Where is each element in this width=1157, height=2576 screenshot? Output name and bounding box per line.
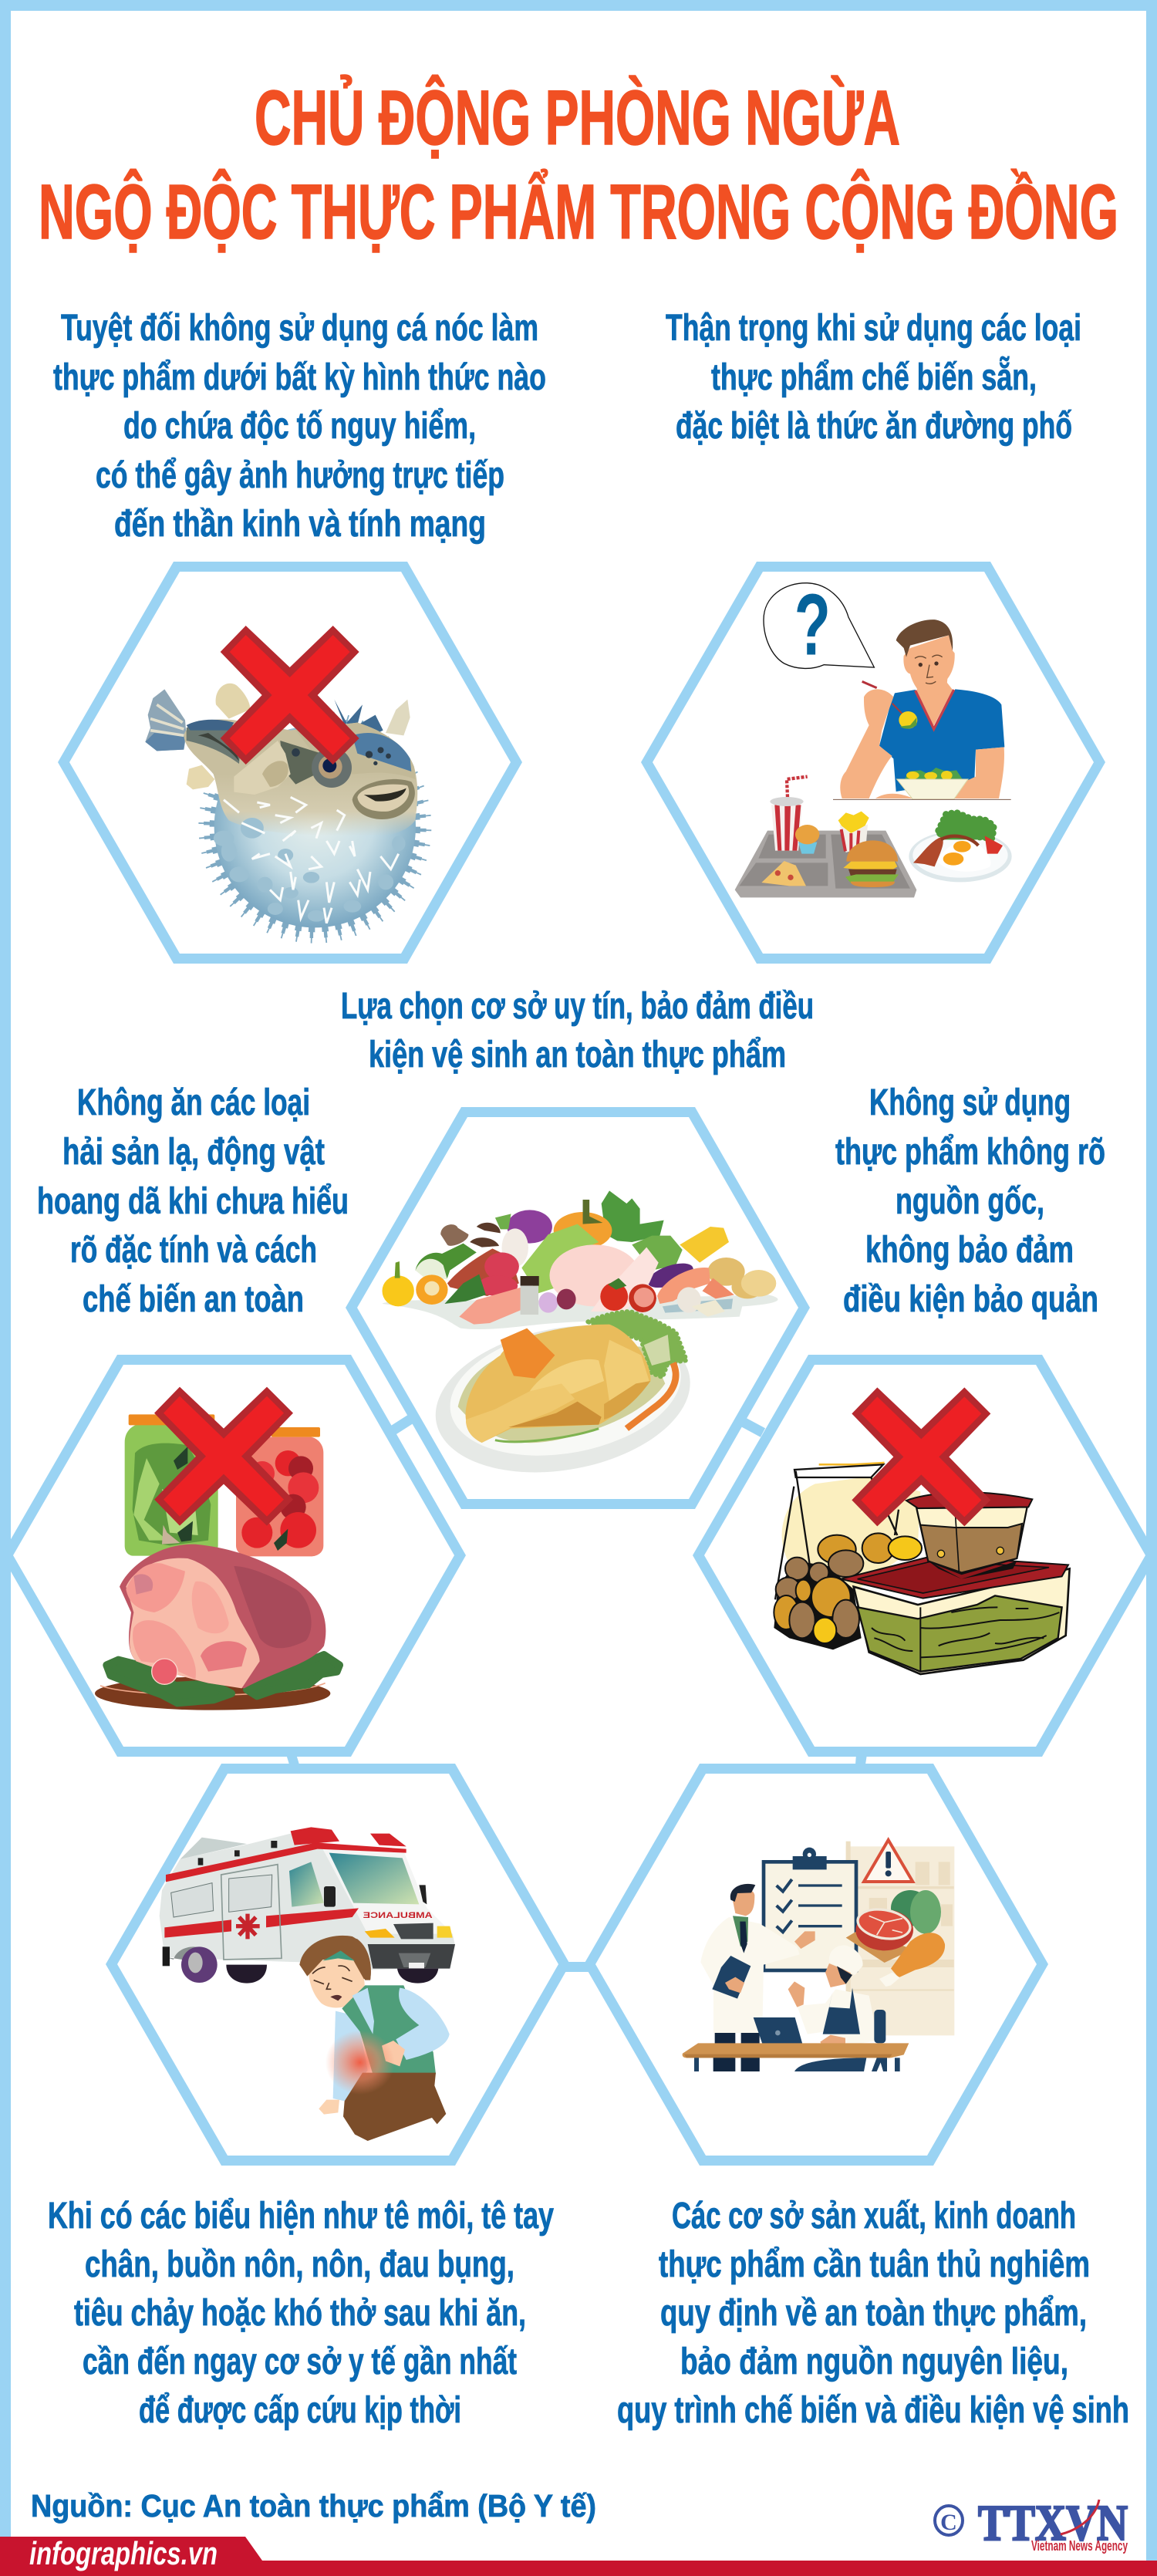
text: do not eat strange seafood: Không ăn các loại [77, 1082, 310, 1123]
text: symptoms and emergency care: tiêu chảy hoặc khó thở sau khi ăn, [74, 2293, 526, 2334]
footer red bar with site name [0, 2535, 1157, 2576]
text: puffer fish warning: đến thần kinh và tính mạng [114, 504, 486, 545]
text: symptoms and emergency care: cần đến ngay cơ sở y tế gần nhất [83, 2341, 517, 2382]
text: unknown origin food [835, 1082, 1105, 1320]
text: food businesses compliance [617, 2196, 1129, 2431]
hexagon frame 6 [106, 1764, 570, 2166]
hexagon frame 5 [693, 1355, 1157, 1757]
text: do not eat strange seafood: rõ đặc tính và cách [70, 1230, 317, 1271]
hexagon frame 3 [346, 1107, 810, 1509]
text: do not eat strange seafood: hải sản lạ, động vật [62, 1132, 325, 1173]
icon: food ingredients and chicken plate [382, 1190, 778, 1492]
text: puffer fish warning: thực phẩm dưới bất kỳ hình thức nào [53, 357, 546, 398]
hexagon frame 2 [641, 562, 1105, 964]
icon: man eating with fast food tray [735, 575, 1012, 897]
source line: Nguồn: Cục An toàn thực phẩm (Bộ Y tế) [31, 2488, 596, 2524]
logo: TTXVN: C [940, 2510, 957, 2535]
text: unknown origin food: không bảo đảm [865, 1230, 1074, 1271]
icon: red cross [221, 626, 359, 765]
icon: food safety inspection scene [683, 1840, 954, 2071]
icon: red cross [154, 1387, 293, 1526]
title [39, 75, 1118, 255]
hexagon frame 4 [2, 1355, 466, 1757]
text: do not eat strange seafood [37, 1082, 349, 1320]
text: symptoms and emergency care: chân, buồn nôn, nôn, đau bụng, [85, 2244, 514, 2285]
text: processed food caution [666, 308, 1081, 447]
text: puffer fish warning: Tuyệt đối không sử dụng cá nóc làm [61, 308, 538, 349]
text: symptoms and emergency care: để được cấp cứu kịp thời [139, 2390, 461, 2431]
hexagon frame 7 [584, 1764, 1048, 2166]
text: choose reputable places: kiện vệ sinh an toàn thực phẩm [369, 1035, 786, 1075]
icon: man eating with fast food tray: ? [794, 575, 831, 674]
logo: TTXVN: TTXVN [978, 2495, 1128, 2551]
icon: ambulance and sick boy [160, 1827, 455, 2141]
text: unknown origin food: Không sử dụng [869, 1082, 1071, 1123]
text: symptoms and emergency care [48, 2196, 554, 2431]
text: do not eat strange seafood: hoang dã khi chưa hiểu [37, 1181, 349, 1222]
text: puffer fish warning [53, 308, 546, 545]
icon: pickle jars and raw meat [95, 1387, 339, 1710]
text: puffer fish warning: có thể gây ảnh hưởng trực tiếp [96, 455, 504, 496]
icon: red cross [852, 1387, 990, 1526]
text: processed food caution: thực phẩm chế biến sẵn, [711, 356, 1037, 398]
text: unknown origin food: nguồn gốc, [896, 1181, 1044, 1222]
text: puffer fish warning: do chứa độc tố nguy hiểm, [123, 406, 476, 447]
icon: puffer fish [145, 626, 429, 940]
footer red bar with site name: infographics.vn [29, 2535, 218, 2571]
connectors between hexagons [286, 1419, 867, 1972]
icon: food containers [774, 1387, 1070, 1674]
text: do not eat strange seafood: chế biến an toàn [83, 1279, 304, 1320]
text: symptoms and emergency care: Khi có các biểu hiện như tê môi, tê tay [48, 2196, 554, 2237]
icon: ambulance and sick boy: AMBULANCE [363, 1911, 433, 1920]
text: choose reputable places [341, 986, 814, 1075]
text: choose reputable places: Lựa chọn cơ sở uy tín, bảo đảm điều [341, 986, 814, 1027]
logo: TTXVN [935, 2495, 1128, 2554]
hexagon frame 1 [58, 562, 522, 964]
